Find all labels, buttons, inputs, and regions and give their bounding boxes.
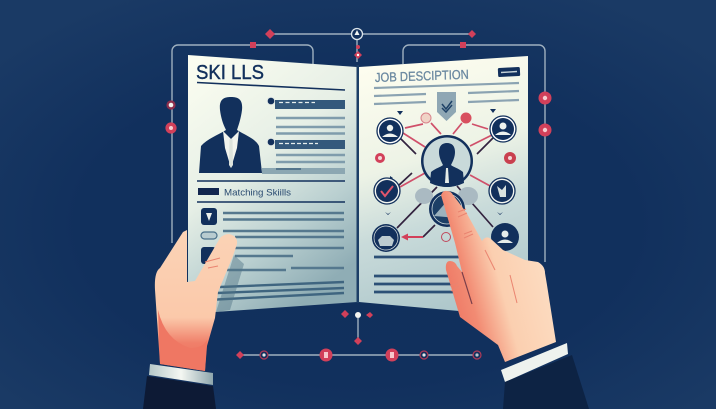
list lines — [223, 213, 344, 270]
network connectors — [397, 123, 493, 240]
text: matching skills: Matching Skiills — [224, 188, 291, 198]
left hand — [143, 230, 244, 409]
small red badges — [375, 112, 516, 242]
heading: skills: SKI LLS — [196, 62, 264, 84]
connector nodes: top — [250, 28, 476, 59]
icon: skill pill — [201, 232, 217, 239]
cuff — [501, 343, 568, 382]
wrist shade — [158, 310, 207, 371]
thumb shadow line — [462, 272, 472, 304]
icon: skill badge — [201, 208, 217, 225]
node: central person — [421, 135, 473, 187]
finger creases — [450, 209, 517, 303]
skill block 1 — [267, 97, 345, 134]
node: mid right — [489, 178, 515, 204]
skin — [155, 230, 237, 371]
panel: job description page — [359, 56, 528, 312]
node: bottom left — [372, 224, 400, 252]
small arrows — [385, 109, 503, 215]
icon: shield check — [437, 92, 456, 121]
panel: skills page — [188, 55, 357, 312]
portrait silhouette — [199, 97, 262, 173]
rule and text lines — [374, 83, 519, 104]
soft shadows behind pointer node — [415, 187, 478, 205]
node: under pointer — [429, 191, 465, 227]
node: check — [374, 178, 400, 204]
tag badge — [498, 67, 520, 77]
sleeve — [503, 355, 589, 409]
divider — [197, 201, 345, 203]
bottom text lines — [374, 257, 470, 292]
heading rule — [197, 82, 345, 90]
right hand — [441, 191, 589, 409]
node: bottom right — [491, 223, 519, 251]
connector nodes: bottom — [236, 310, 481, 362]
spine — [356, 65, 359, 303]
skin — [441, 191, 556, 362]
skill block 2 — [262, 138, 345, 174]
divider — [197, 180, 345, 182]
sleeve — [143, 376, 216, 409]
cuff — [149, 364, 213, 385]
thumb creases — [205, 258, 220, 268]
label bar — [198, 188, 219, 195]
connector lines — [172, 34, 545, 355]
icon: skill tag — [201, 247, 216, 264]
heading: job description: JOB DESCIPTION — [375, 67, 469, 85]
node: top right person — [490, 116, 516, 142]
thumb shadow — [216, 255, 244, 312]
bottom lines — [217, 282, 344, 300]
connector nodes: sides — [165, 92, 552, 136]
node: top left person — [377, 118, 403, 144]
